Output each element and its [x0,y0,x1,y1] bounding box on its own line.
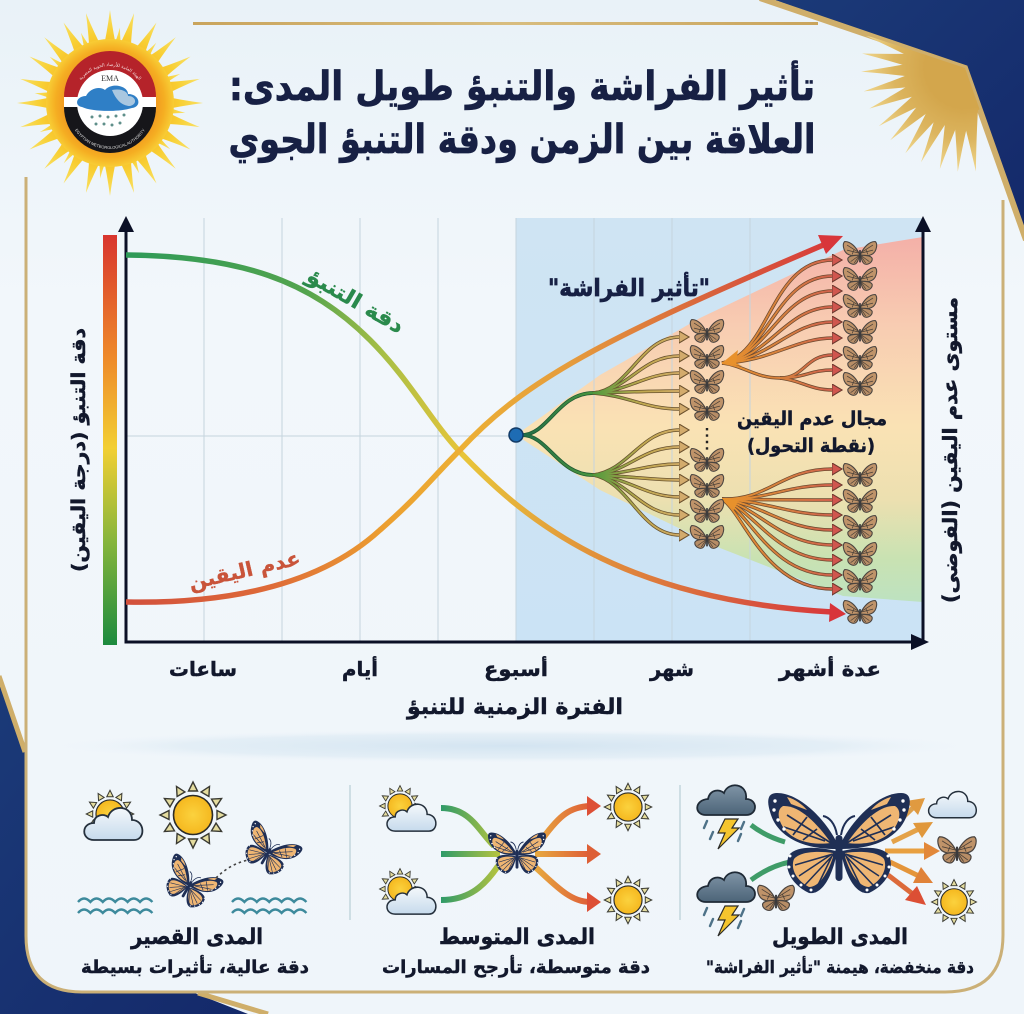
icon: sun [160,782,226,848]
panel: medium range [380,783,652,978]
icon: monarch butterfly [768,793,910,893]
icon: waves [78,898,306,913]
time axis tick labels: شهر [649,657,694,681]
label: uncertainty range [737,408,887,457]
label: uncertainty range: مجال عدم اليقين [737,408,887,430]
curve label: uncertainty: عدم اليقين [186,546,303,595]
logo: EMA sun emblem: EMA [101,74,119,83]
transition point [509,428,523,442]
blue long-range panel [516,218,923,642]
time axis tick labels [169,655,881,681]
description: دقة عالية، تأثيرات بسيطة [81,955,309,978]
icon: partly cloudy [380,786,436,914]
gold frame [26,177,1003,992]
left axis label: دقة التنبؤ (درجة اليقين) [68,328,90,572]
curve label: accuracy: دقة التنبؤ [302,263,408,338]
icon: gold corner sunburst [861,36,980,172]
logo: EMA sun emblem: الهيئة العامة للأرصاد الجوية المصرية [80,62,142,80]
panel: long range [697,785,976,978]
time axis tick labels: أيام [342,655,378,681]
axes [118,216,931,650]
logo: EMA sun emblem [17,10,203,196]
chart: butterfly effect diagram [68,216,962,720]
icon: suns [604,783,652,924]
outflow arrows [532,796,601,912]
icon: storm clouds [697,785,755,936]
icon: partly cloudy [84,790,142,840]
right axis label: مستوى عدم اليقين (الفوضى) [938,297,962,603]
icon: butterflies with dotted path [155,820,304,916]
panel: short range [78,782,309,978]
title: تأثير الفراشة والتنبؤ طويل المدى: [229,60,815,110]
time axis title: الفترة الزمنية للتنبؤ [406,695,623,720]
heading: المدى القصير [130,925,263,950]
icon: butterfly [488,832,546,874]
heading: المدى الطويل [772,925,908,950]
icon: cloud [929,791,976,818]
title [228,60,816,163]
uncertainty fan area [516,237,923,602]
icon: small butterflies [758,837,976,910]
butterflies: right column [843,241,877,623]
time axis tick labels: أسبوع [484,655,548,681]
description: دقة منخفضة، هيمنة "تأثير الفراشة" [706,956,974,978]
certainty gradient bar [103,235,117,645]
corner: navy top right [760,0,1024,240]
inflow arrows [751,825,790,880]
description: دقة متوسطة، تأرجح المسارات [382,955,650,978]
label: butterfly effect: "تأثير الفراشة" [548,272,710,302]
branching paths from transition point [522,260,833,589]
logo: EMA sun emblem: EGYPTIAN METEOROLOGICAL AUTHORITY [75,128,144,149]
time axis tick labels: عدة أشهر [778,655,881,681]
curve: uncertainty [126,235,843,602]
gold top rule [193,22,818,25]
label: uncertainty range: (نقطة التحول) [747,435,875,457]
icon: sun [932,880,976,924]
title: العلاقة بين الزمن ودقة التنبؤ الجوي [228,117,816,163]
time axis tick labels: ساعات [169,657,237,681]
heading: المدى المتوسط [439,925,595,950]
butterflies: middle column [690,319,724,548]
outflow arrows [885,798,940,905]
corner: navy bottom left [0,676,268,1014]
curve: forecast accuracy [126,255,846,622]
inflow arrows [441,808,500,900]
